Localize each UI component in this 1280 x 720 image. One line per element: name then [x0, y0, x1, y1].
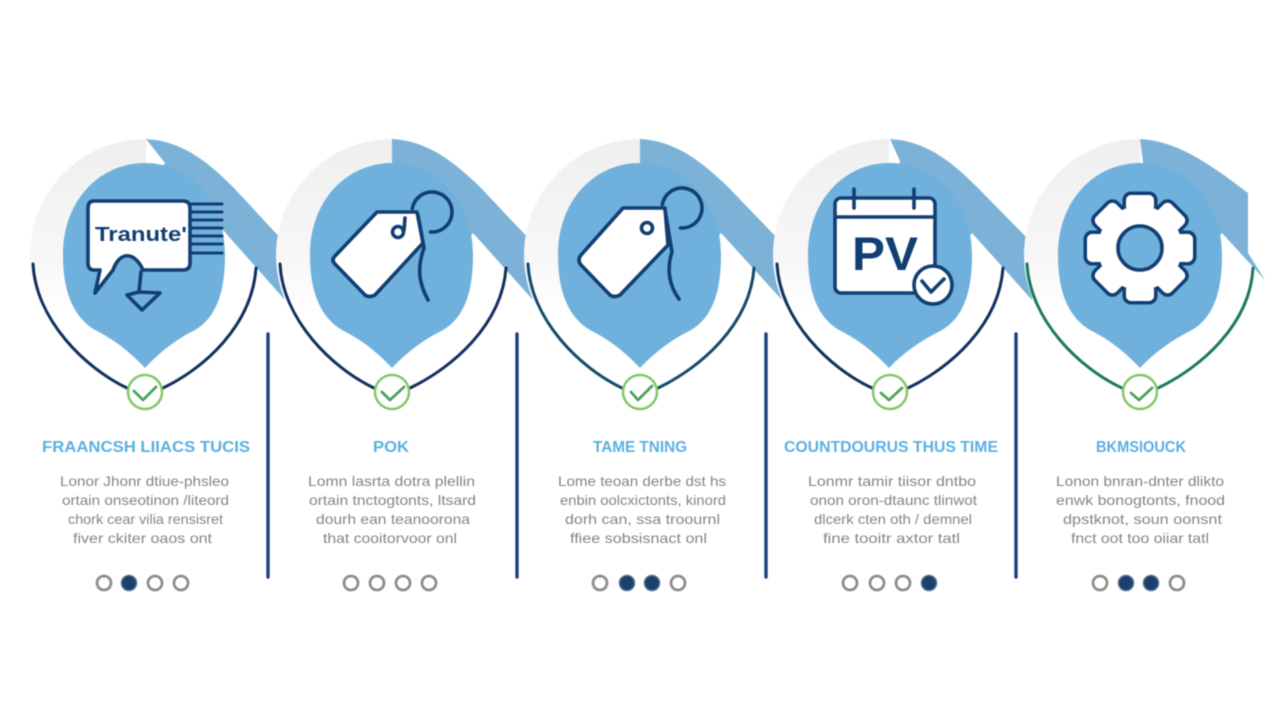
drop	[808, 163, 972, 368]
body text: dourh ean teanoorona	[316, 511, 470, 527]
check badge	[623, 375, 657, 409]
step 2: pos	[276, 139, 533, 590]
body text: Lomn lasrta dotra plellin	[308, 473, 475, 489]
body text	[60, 473, 229, 546]
arc	[777, 264, 1003, 388]
drop	[558, 163, 721, 368]
ring	[1024, 139, 1140, 371]
arc	[528, 264, 754, 388]
heading: TAME TNING	[593, 439, 687, 456]
step 1: financial	[30, 139, 285, 590]
progress dots	[97, 576, 188, 590]
step 5: gear	[1024, 139, 1265, 590]
heading: FRAANCSH LIIACS TUCIS	[42, 439, 250, 456]
icon: gear	[1087, 195, 1193, 301]
body text: Lonon bnran-dnter dlikto	[1056, 473, 1224, 489]
ring	[773, 139, 889, 371]
step 4: calendar	[773, 139, 1032, 590]
drop	[1058, 163, 1222, 368]
ribbon	[640, 139, 782, 300]
drop	[63, 163, 225, 368]
icon: speech bubble: Tranute'	[95, 224, 187, 246]
ring	[524, 139, 640, 371]
body text: Lonmr tamir tiisor dntbo	[808, 473, 976, 489]
body text: fnct oot too oiiar tatl	[1071, 530, 1209, 546]
arc	[280, 264, 506, 388]
check badge	[1123, 375, 1157, 409]
icon: calendar	[835, 189, 952, 304]
body text: enwk bonogtonts, fnood	[1056, 492, 1225, 508]
check badge	[128, 375, 162, 409]
body text: ortain tnctogtonts, ltsard	[309, 492, 476, 508]
body text: Lome teoan derbe dst hs	[558, 473, 726, 489]
drop	[310, 163, 473, 368]
body text: ortain onseotinon /liteord	[62, 492, 229, 508]
body text: that cooitorvoor onl	[323, 530, 457, 546]
check badge	[873, 375, 907, 409]
heading: BKMSIOUCK	[1096, 439, 1186, 456]
check badge	[375, 375, 409, 409]
ring	[276, 139, 392, 371]
ribbon	[392, 139, 533, 300]
body text: enbin oolcxictonts, kinord	[560, 492, 726, 508]
ring	[30, 139, 146, 371]
ribbon	[889, 139, 1032, 300]
body text	[808, 473, 977, 546]
step 3: tagging	[524, 139, 782, 590]
heading: POK	[373, 439, 409, 456]
arc	[33, 264, 256, 388]
body text: fine tooitr axtor tatl	[823, 530, 960, 546]
ribbon	[1140, 139, 1265, 280]
progress dots	[593, 576, 685, 590]
body text	[558, 473, 726, 546]
icon: price tag	[333, 189, 455, 300]
body text	[308, 473, 476, 546]
body text: Lonor Jhonr dtiue-phsleo	[60, 473, 229, 489]
body text	[1056, 473, 1225, 546]
body text: dlcerk cten oth / demnel	[814, 511, 972, 527]
progress dots	[1093, 576, 1184, 590]
ribbon	[145, 139, 285, 300]
body text: onon oron-dtaunc tlinwot	[810, 492, 977, 508]
icon: price tag	[579, 185, 705, 299]
icon: calendar: PV	[852, 227, 919, 280]
body text: ffiee sobsisnact onl	[570, 530, 707, 546]
progress dots	[843, 576, 936, 590]
body text: dorh can, ssa troournl	[565, 511, 720, 527]
body text: dpstknot, soun oonsnt	[1063, 511, 1222, 527]
progress dots	[344, 576, 436, 590]
icon: speech bubble	[88, 201, 222, 310]
body text: chork cear vilia rensisret	[68, 511, 223, 527]
column dividers	[268, 334, 1016, 577]
arc	[1027, 264, 1253, 388]
heading: COUNTDOURUS THUS TIME	[784, 439, 998, 456]
body text: fiver ckiter oaos ont	[73, 530, 212, 546]
